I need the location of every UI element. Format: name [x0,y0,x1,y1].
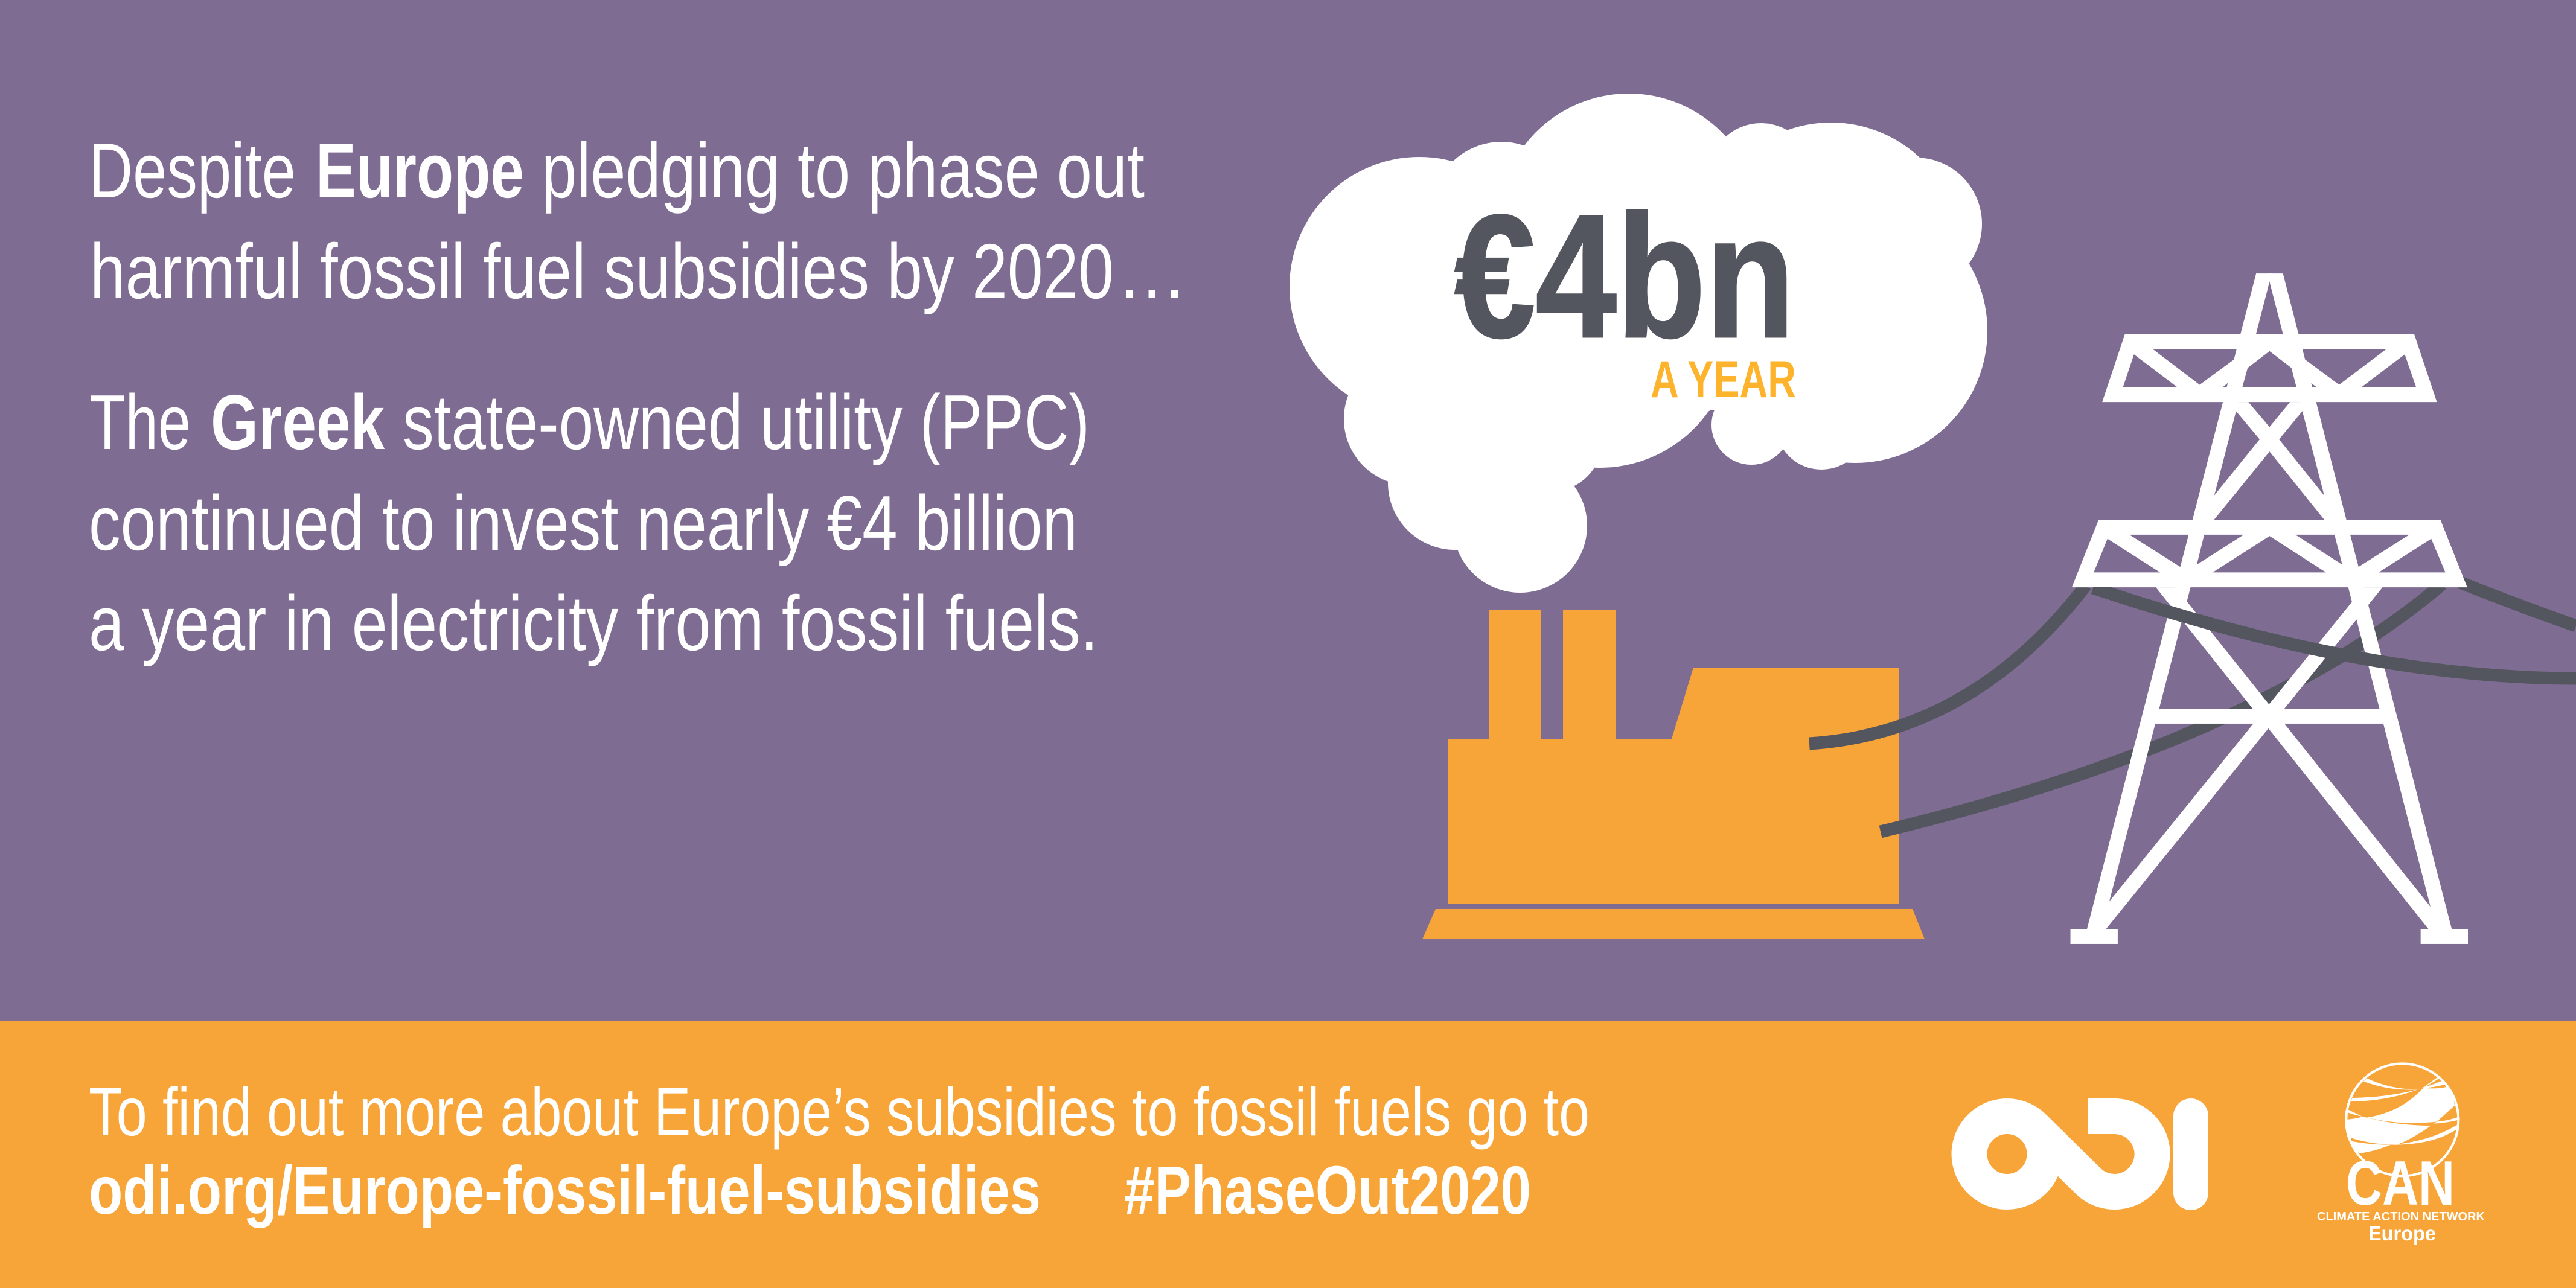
globe emblem [2345,1063,2459,1176]
CAN letters: CAN [2346,1149,2455,1219]
text block: Greek utility [89,379,1098,667]
power lines behind the pylon [1809,582,2576,832]
text block: Europe pledge: … [1116,228,1187,315]
icon: electricity pylon [2071,273,2468,944]
icon: smoke cloud [1290,94,1987,593]
text block: Greek utility: continued to invest nearly €4 billion [89,480,1078,567]
text block: find out more: To find out more about Europe’s subsidies to fossil fuels go to [89,1074,1590,1150]
text block: Greek utility: The [89,379,191,466]
text block: find out more: #PhaseOut2020 [1124,1152,1531,1228]
text block: Europe pledge [89,127,1187,315]
panel: footer band [0,1021,2576,1288]
power line over the pylon [2093,588,2576,678]
logo: Climate Action Network Europe [2317,1063,2485,1245]
text block: Greek utility: a year in electricity from fossil fuels. [89,580,1098,667]
text block: find out more [89,1074,1590,1228]
text block: Greek utility: Greek [211,379,385,466]
text block: Greek utility: state-owned utility (PPC) [403,379,1090,466]
panel: purple background [0,0,2576,1021]
Climate Action Network caption: CLIMATE ACTION NETWORK [2317,1210,2485,1223]
icon: factory [1422,610,1925,939]
text block: Europe pledge: Europe [316,127,524,214]
text block: Europe pledge: pledging to phase out [542,127,1145,214]
big number: 4bn: €4bn [1454,179,1795,374]
logo: ODI [1969,1098,2208,1210]
Europe caption: Europe [2368,1222,2436,1245]
text block: Europe pledge: harmful fossil fuel subsidies by 2020 [90,228,1114,315]
text block: find out more: odi.org/Europe-fossil-fuel-subsidies [89,1152,1041,1228]
text block: Europe pledge: Despite [89,127,296,214]
label: a year: A YEAR [1651,351,1796,409]
